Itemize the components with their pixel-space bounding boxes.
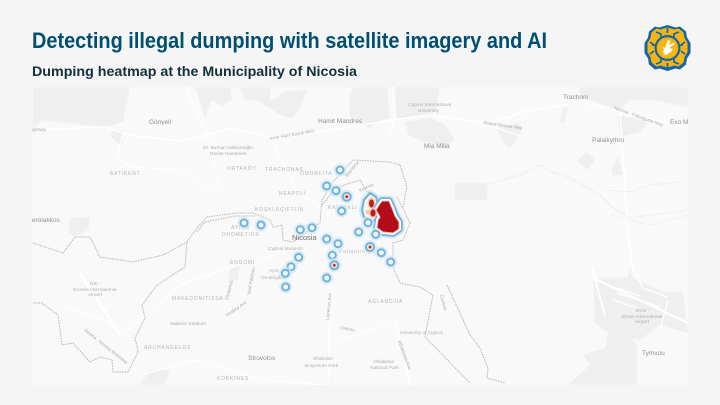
heatmap xyxy=(238,164,399,294)
map labels: Athalassas Ave xyxy=(397,340,412,371)
icon: university logo xyxy=(644,25,690,71)
map labels: Shakolas xyxy=(313,356,333,362)
map panel xyxy=(32,87,692,385)
map labels: ORTAKÖY xyxy=(227,165,257,172)
map labels xyxy=(32,94,692,382)
land use areas xyxy=(33,87,688,385)
map labels: OMORFITA xyxy=(300,171,332,177)
map labels: Omologites xyxy=(261,275,286,281)
map labels: Bayraktar xyxy=(344,159,360,178)
hotspot rings xyxy=(238,164,397,294)
map labels: TRACHONAS xyxy=(265,167,304,173)
map labels: Nicosia International xyxy=(73,287,116,293)
map labels: AYIOS xyxy=(231,225,250,231)
airport runways xyxy=(593,278,687,326)
map labels: Dr. Burhan Nalbantoğlu xyxy=(203,145,253,151)
map labels: erolakkos xyxy=(32,217,61,224)
map labels: Cyprus Museum xyxy=(268,246,303,252)
subtitle: Dumping heatmap at the Municipality of Nicosia xyxy=(32,63,357,79)
map labels: Devlet Hastanesi xyxy=(210,151,246,157)
map labels: NIC - xyxy=(90,281,102,287)
map labels: DHOMETIOS xyxy=(222,232,259,238)
map labels: KOŞKLUÇIFTLIK xyxy=(255,207,304,213)
map labels: MAKEDONITISSA xyxy=(172,296,224,302)
map labels: Buffer xyxy=(391,205,401,219)
red-centre hotspots xyxy=(327,190,377,272)
map labels: Ayio xyxy=(269,268,279,274)
title: Detecting illegal dumping with satellite imagery and AI xyxy=(32,28,547,53)
map labels: Makario Stadium xyxy=(170,321,206,327)
map labels: Tymvou xyxy=(642,350,665,357)
map labels: Dzema - Nicosia Motorway xyxy=(83,328,129,365)
map labels: Gönyeli xyxy=(149,119,171,126)
map labels: Strovolos xyxy=(248,355,276,362)
map labels: ARCHANGELOS xyxy=(144,345,191,351)
map labels: University xyxy=(418,108,440,114)
map labels: Cyclone xyxy=(439,294,448,311)
map labels: Omirou xyxy=(340,325,356,333)
map labels: KOKKINES xyxy=(217,376,249,382)
map labels: Kyrenia xyxy=(358,182,375,193)
map labels: University of Cyprus xyxy=(400,330,444,336)
map labels: Ekaterinis xyxy=(224,279,234,300)
map labels: Airport xyxy=(635,319,650,325)
roads xyxy=(96,114,667,373)
map labels: National Park xyxy=(370,365,399,371)
rivers xyxy=(480,165,688,225)
map labels: ENGOMI xyxy=(230,260,255,266)
map labels: ECN - xyxy=(636,308,649,314)
map labels: Exo Me xyxy=(670,119,692,126)
map labels: KAIMAKLI xyxy=(328,205,357,211)
map labels: Lemesos Ave xyxy=(325,292,332,320)
map labels: Athalassa xyxy=(373,359,394,365)
map labels: AGLANDJIA xyxy=(368,299,403,305)
map labels: Trachoni xyxy=(563,94,588,101)
buffer zone dotted line xyxy=(32,160,505,383)
map labels: Airport xyxy=(88,292,103,298)
map labels: ector Fazıl Kuçuk Blvd xyxy=(269,128,315,141)
map labels: Emporium Park xyxy=(305,363,339,369)
map labels: Nicosia - Famagusta Hwy xyxy=(614,105,664,128)
map labels: Hamit Mandres xyxy=(318,118,363,125)
map labels: Yenikoy Ave xyxy=(225,300,248,318)
map labels: Nicosia xyxy=(292,233,317,242)
map labels: Palaikythro xyxy=(592,137,625,144)
map labels: BATIKENT xyxy=(110,171,140,177)
map labels: Pallouriotissa xyxy=(339,249,380,255)
map labels: Sfanta-Nicosia Hwy xyxy=(483,120,523,131)
map labels: ighway xyxy=(32,127,47,132)
map labels: Ercan International xyxy=(622,314,662,320)
map labels: NEAPOLI xyxy=(279,191,306,197)
map labels: Vasil Paidiyou xyxy=(246,266,256,295)
hotspot cluster: north-east xyxy=(362,193,399,233)
map background xyxy=(32,87,688,385)
map labels: Cyprus International xyxy=(408,102,451,108)
map labels: Mia Milia xyxy=(424,143,450,150)
